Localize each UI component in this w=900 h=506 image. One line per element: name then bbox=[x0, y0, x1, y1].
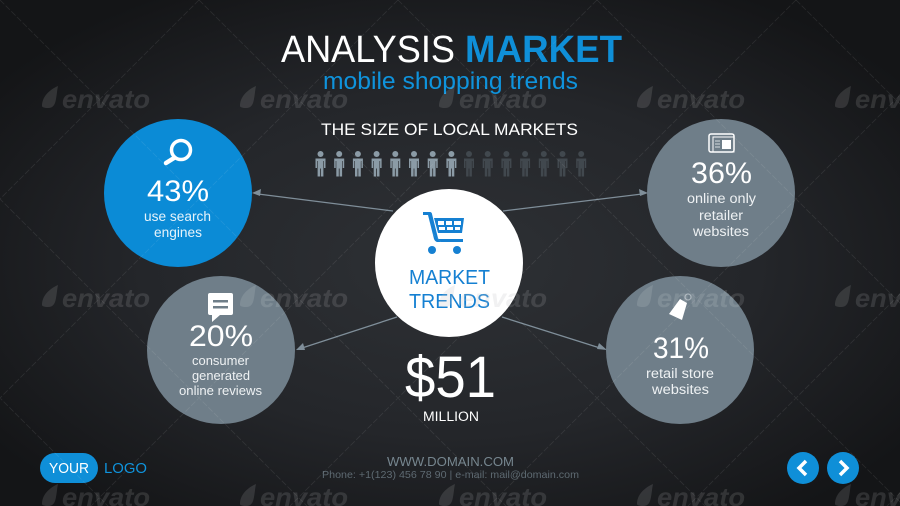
logo bbox=[40, 453, 147, 483]
icon: newspaper bbox=[709, 134, 734, 152]
panel: retail store websites bbox=[606, 276, 754, 424]
title: MARKET bbox=[465, 29, 622, 71]
panel: consumer generated online reviews bbox=[147, 276, 295, 424]
icon: price tag bbox=[669, 294, 691, 320]
icon: speech bubble bbox=[208, 293, 233, 322]
panel: online only retailer websites: websites bbox=[692, 224, 749, 239]
icon: magnifier bbox=[166, 140, 190, 163]
stat: $51: $51 bbox=[405, 345, 496, 410]
arrow: to consumer reviews bbox=[296, 317, 397, 350]
stat: 43%: 43% bbox=[147, 175, 209, 208]
button: previous bbox=[787, 452, 819, 484]
subtitle: mobile shopping trends bbox=[323, 68, 578, 95]
label: retail store websites: retail store bbox=[646, 366, 714, 381]
label: consumer generated online reviews: consumer bbox=[192, 353, 250, 368]
icon: shopping cart bbox=[423, 212, 464, 254]
panel: consumer generated online reviews: generated bbox=[192, 368, 250, 383]
title bbox=[281, 29, 622, 71]
label: market trends: MARKET bbox=[409, 267, 490, 289]
footer: contact: Phone: +1(123) 456 78 90 | e-mail: mail@domain.com bbox=[322, 469, 579, 481]
title: ANALYSIS bbox=[281, 29, 455, 71]
label: million: MILLION bbox=[423, 409, 479, 424]
label: online only retailer websites: online only bbox=[687, 191, 756, 206]
button: next bbox=[827, 452, 859, 484]
panel: retail store websites: websites bbox=[651, 382, 709, 397]
label: use search engines: use search bbox=[144, 209, 211, 224]
footer: website: WWW.DOMAIN.COM bbox=[387, 455, 514, 469]
panel: consumer generated online reviews: online reviews bbox=[179, 383, 263, 398]
panel: market trends center: TRENDS bbox=[409, 291, 490, 313]
panel: market trends center bbox=[375, 189, 523, 337]
arrow: to online only retailers bbox=[503, 189, 648, 211]
heading: the size of local markets: THE SIZE OF LOCAL MARKETS bbox=[321, 120, 578, 139]
arrow: to search engines bbox=[252, 189, 393, 211]
panel: search engines: engines bbox=[154, 225, 202, 240]
watermark over center circle bbox=[439, 285, 516, 307]
logo: YOUR bbox=[49, 460, 89, 477]
people chart bbox=[316, 151, 586, 176]
arrow: to retail store websites bbox=[502, 317, 607, 350]
panel: online only retailer websites bbox=[647, 119, 795, 267]
panel: online only retailer websites: retailer bbox=[699, 208, 744, 223]
logo: LOGO bbox=[104, 460, 147, 477]
stat: 20%: 20% bbox=[189, 320, 253, 353]
panel: search engines bbox=[104, 119, 252, 267]
watermarks bbox=[42, 84, 900, 506]
stat: 36%: 36% bbox=[691, 157, 752, 190]
stat: 31%: 31% bbox=[653, 332, 709, 365]
